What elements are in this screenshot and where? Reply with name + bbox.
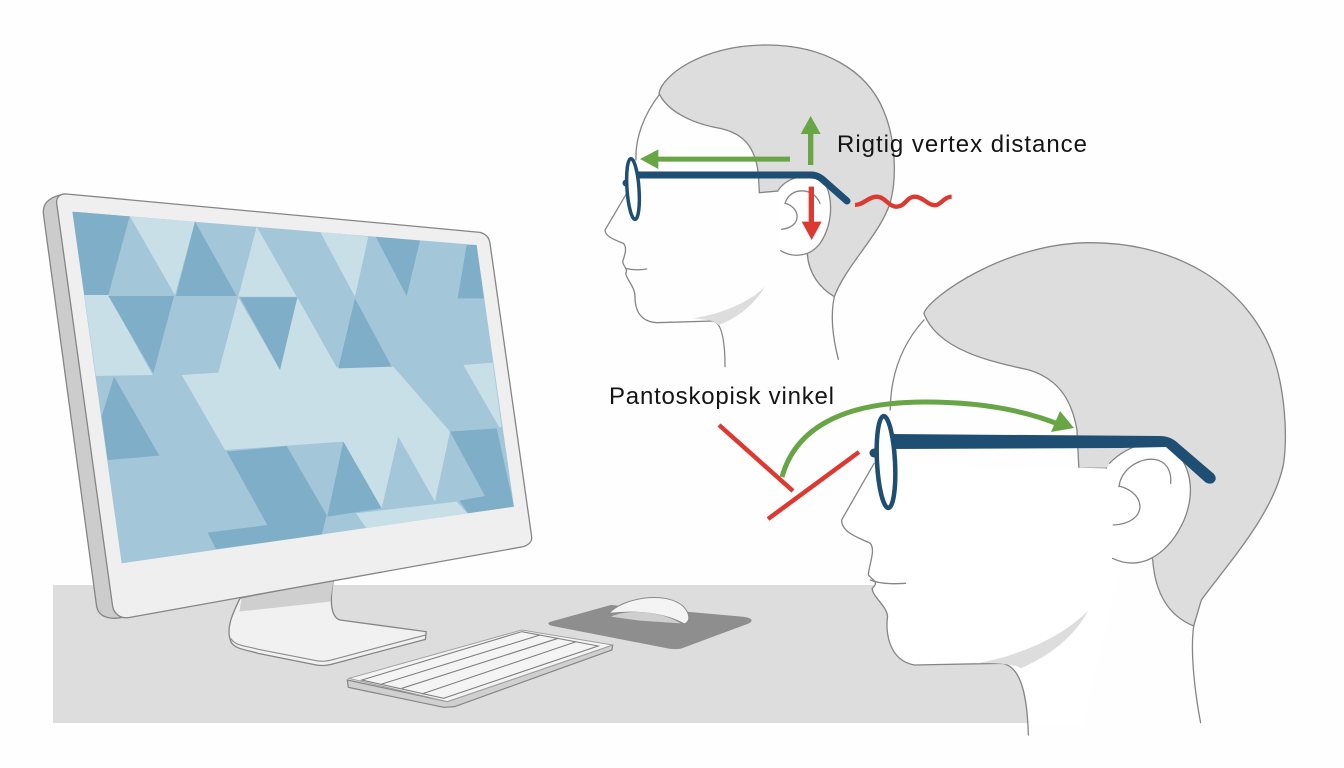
- label: correct vertex distance: Rigtig vertex distance: [837, 131, 1087, 158]
- red pantoscopic angle lines: [719, 425, 859, 519]
- large head, side view: [842, 243, 1285, 735]
- mouse pad: [548, 605, 752, 649]
- green arrow: forward: [640, 149, 790, 169]
- desk surface: [53, 585, 1028, 723]
- mouth line: [870, 580, 906, 584]
- green arc arrow: [782, 402, 1074, 477]
- back of neck: [1192, 626, 1201, 723]
- face profile: [842, 320, 1028, 735]
- monitor screen with triangle wallpaper: [72, 212, 514, 564]
- jaw shadow: [976, 610, 1088, 668]
- jaw shadow: [693, 287, 765, 325]
- monitor: [43, 194, 532, 618]
- hair: [924, 243, 1285, 626]
- large head glasses: [870, 416, 1216, 508]
- lens: [875, 416, 897, 508]
- nose pad: [870, 448, 878, 458]
- ear: [1083, 443, 1190, 563]
- face fill: [842, 463, 1121, 727]
- small head glasses: [622, 158, 847, 220]
- lens: [625, 158, 641, 220]
- mouse: [609, 597, 689, 624]
- nose pad: [622, 180, 630, 186]
- keyboard: [347, 630, 613, 707]
- red arrow: down: [802, 187, 822, 240]
- hair: [659, 45, 894, 297]
- mouse pad and mouse: [548, 597, 752, 649]
- red wavy line: [855, 197, 952, 207]
- face profile: [605, 95, 725, 367]
- ear: [778, 176, 831, 255]
- temple arm: [889, 434, 1216, 484]
- small head, side view: [605, 45, 894, 367]
- mouth line: [626, 268, 647, 270]
- back of neck: [832, 297, 838, 359]
- monitor side edge: [43, 195, 140, 618]
- label: pantoscopic angle: Pantoskopisk vinkel: [609, 383, 834, 410]
- green arrow: up: [801, 116, 821, 165]
- monitor stand: [229, 580, 426, 666]
- temple arm: [637, 175, 847, 201]
- monitor front bezel: [57, 194, 532, 618]
